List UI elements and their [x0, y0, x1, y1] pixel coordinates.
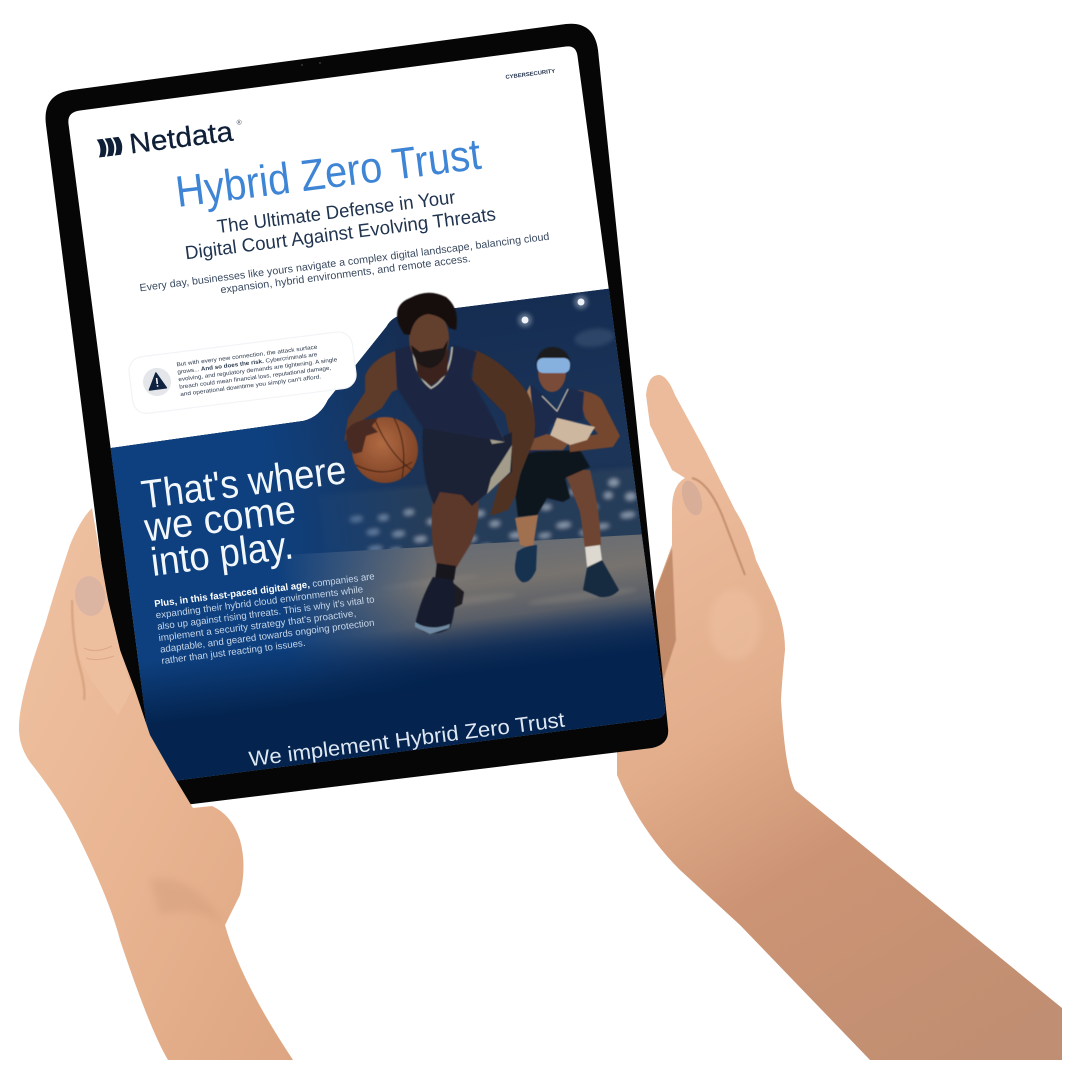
alert text: grows... And so does the risk. Cybercriminals are: [177, 352, 318, 376]
registered mark: ®: [236, 118, 243, 127]
front shoe: [415, 577, 455, 633]
jersey: [395, 345, 505, 442]
main player dribbling: [344, 293, 535, 634]
headline on blue: we come: [141, 488, 298, 551]
face: [409, 311, 449, 365]
alert text: evolving, and regulatory demands are tightening. A single: [178, 357, 338, 383]
intro paragraph: Every day, businesses like yours navigate a complex digital landscape, balancing cloud: [139, 232, 550, 294]
subtitle line one: The Ultimate Defense in Your: [216, 187, 457, 238]
shorts stripe: [486, 423, 513, 494]
card outline: [127, 330, 358, 415]
alert text: and operational downtime you simply can't afford.: [180, 374, 322, 398]
alert text: [176, 342, 339, 398]
court floor: [126, 534, 660, 722]
back head: [538, 370, 566, 392]
headline on blue: [137, 448, 357, 585]
alert text: breach could mean financial loss, reputational damage,: [179, 365, 332, 391]
screen text in tablet coordinates: [93, 69, 638, 781]
closing line: We implement Hybrid Zero Trust: [248, 709, 566, 771]
back left leg: [515, 515, 538, 548]
bottom navy fade: [140, 606, 665, 780]
tablet: [40, 20, 700, 820]
body paragraph on blue: Plus, in this fast-paced digital age, companies are: [154, 571, 375, 610]
back left arm: [526, 434, 570, 450]
body paragraph on blue: also up against rising threats. This is why it's vital to: [157, 594, 375, 633]
right hand and forearm: [617, 375, 1062, 1060]
subtitle line two: Digital Court Against Evolving Threats: [184, 204, 497, 264]
back jersey: [527, 385, 584, 454]
white page background: [68, 46, 666, 780]
Netdata logo: [96, 114, 246, 163]
headline on blue: into play.: [148, 523, 296, 585]
right arm: [472, 350, 535, 516]
thumb: [73, 574, 132, 715]
blue photo panel: [110, 288, 666, 780]
rear shoe: [453, 583, 464, 608]
thumbnail: [72, 574, 108, 618]
intro paragraph: expansion, hybrid environments, and remote access.: [220, 254, 471, 296]
alert icon: [141, 366, 173, 398]
shorts: [422, 426, 512, 506]
back right shoe: [583, 560, 619, 597]
crowd: [347, 468, 642, 550]
body paragraph on blue: rather than just reacting to issues.: [161, 638, 306, 667]
body paragraph on blue: adaptable, and geared towards ongoing protection: [159, 618, 375, 656]
back shoulder: [526, 384, 533, 409]
left blue overlay: [110, 346, 420, 723]
back shorts: [515, 450, 590, 517]
back right sock: [585, 545, 602, 567]
left hand and forearm: [19, 508, 293, 1060]
beard: [411, 340, 448, 368]
body paragraph on blue: expanding their hybrid cloud environments while: [155, 584, 364, 621]
alert card: [127, 330, 358, 415]
basketball: [352, 417, 418, 483]
left arm: [344, 350, 400, 442]
knuckle creases: [84, 646, 114, 660]
logo chevrons: [97, 137, 123, 157]
title: Hybrid Zero Trust: [173, 130, 484, 217]
back left shoe: [515, 545, 537, 582]
dribbling hand: [346, 418, 378, 454]
navy base: [110, 288, 665, 780]
finger crease: [692, 478, 745, 575]
fingernail: [678, 478, 706, 518]
body paragraph on blue: implement a security strategy that's proactive,: [158, 608, 357, 644]
screen background in tablet coordinates: [110, 288, 666, 780]
shadow behind fingers: [655, 548, 676, 690]
player with tablet in background: [514, 347, 620, 597]
shoe sole: [415, 622, 450, 634]
knuckle highlight: [709, 589, 761, 661]
headline on blue: That's where: [139, 448, 349, 518]
hair: [397, 293, 457, 335]
back right arm: [568, 390, 620, 452]
front leg: [432, 488, 478, 568]
ceiling glow: [574, 328, 614, 348]
jersey neckline: [413, 347, 452, 388]
floor streaks: [416, 582, 633, 605]
back right leg: [564, 470, 601, 548]
category label: CYBERSECURITY: [505, 69, 556, 81]
wrist shadow: [150, 878, 225, 925]
clipboard: [550, 418, 595, 445]
tablet screen: [68, 46, 666, 780]
goggles: [537, 358, 570, 373]
thumb shadow: [72, 600, 84, 700]
arena background: [110, 288, 642, 561]
sock: [435, 563, 456, 580]
body paragraph on blue: [154, 571, 383, 667]
tablet bezel: [46, 24, 668, 808]
arena lights: [518, 295, 588, 327]
neck: [414, 350, 449, 386]
alert text: But with every new connection, the attack surface: [176, 345, 318, 368]
back jersey neckline: [542, 389, 568, 411]
camera dots: [301, 62, 321, 66]
logo wordmark: Netdata: [128, 116, 235, 159]
